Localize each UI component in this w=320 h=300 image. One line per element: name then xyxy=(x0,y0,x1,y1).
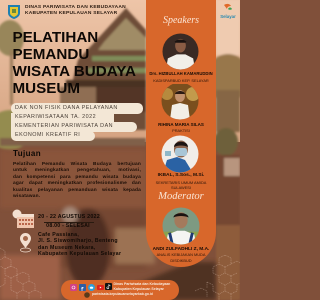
contact text: Dinas Pariwisata dan Kebudayaan xyxy=(114,282,170,286)
logo: Selayar tourism: Selayar xyxy=(220,14,236,19)
purpose paragraph: Pelatihan Pemandu Wisata Budaya bertujuan xyxy=(13,162,141,166)
icon: calendar xyxy=(12,210,34,228)
header organisation text: KABUPATEN KEPULAUAN SELAYAR xyxy=(25,11,117,16)
title xyxy=(12,29,136,97)
time: 08.00 - SELESAI xyxy=(46,223,90,229)
contact text xyxy=(114,282,170,291)
title: WISATA BUDAYA xyxy=(12,63,136,80)
contact text: Kabupaten Kepulauan Selayar xyxy=(114,287,164,291)
moderator heading: Moderator xyxy=(158,191,204,202)
venue text: dan Museum Nekara, xyxy=(38,244,96,250)
subtitle pills: DAK NON FISIK DANA PELAYANAN xyxy=(15,105,118,111)
venue text xyxy=(38,232,121,257)
title: MUSEUM xyxy=(12,80,80,97)
title: PEMANDU xyxy=(12,46,89,63)
speaker role 3 xyxy=(156,180,206,190)
moderator photo xyxy=(162,208,200,244)
speaker photo 3 xyxy=(162,136,198,172)
moderator name: ANDI ZULFADHLI Z, M.A. xyxy=(153,246,209,252)
icon: instagram xyxy=(70,284,77,291)
hexagon network pattern left xyxy=(0,248,42,299)
purpose paragraph: agar dapat meningkatkan profesionalisme dan xyxy=(13,181,141,186)
logo: Selayar tourism xyxy=(220,4,236,19)
icon: crest small xyxy=(84,292,90,298)
icon: facebook xyxy=(79,284,86,291)
subtitle pills: EKONOMI KREATIF RI xyxy=(15,132,80,138)
subtitle pills: KEPARIWISATAAN TA. 2022 xyxy=(15,114,96,120)
subtitle pills xyxy=(11,103,143,141)
speaker name 3: IKBAL, S.Sos., M.Si. xyxy=(158,173,204,178)
purpose paragraph: kualitas pelayanan pemanduan wisata kepada xyxy=(13,188,141,193)
moderator role xyxy=(156,252,206,263)
speaker role 3: SULAWESI xyxy=(171,185,191,190)
logo: regency crest xyxy=(8,5,20,19)
moderator role: ANALIS KEBIJAKAN MUDA xyxy=(157,252,205,257)
venue text: Kabupaten Kepulauan Selayar xyxy=(38,251,121,257)
speaker role 1: KADISPARBUD KEP. SELAYAR xyxy=(153,78,209,83)
date: 20 - 22 AGUSTUS 2022 xyxy=(38,214,100,220)
venue text: Jl. S. Siswomiharjo, Benteng xyxy=(38,238,118,244)
purpose paragraph: untuk meningkatkan pengetahuan, motivasi, xyxy=(13,168,141,173)
speaker name 2: RIHINA MARIA SILAS xyxy=(158,122,204,127)
speaker name 1: Drs. HIZBULLAH KAMARUDDIN xyxy=(149,71,213,76)
background photo collage xyxy=(0,0,240,300)
speaker role 3: SEKRETARIS UMUM AMIDA xyxy=(156,180,206,184)
orange speakers column xyxy=(146,0,216,267)
moderator role: DISDIKBUD xyxy=(170,258,192,263)
speaker photo 1 xyxy=(162,34,198,70)
speakers heading: Speakers xyxy=(163,15,199,26)
hexagon network pattern right xyxy=(195,255,240,300)
purpose paragraph: wisatawan. xyxy=(13,194,40,199)
footer pill: social media and contact xyxy=(61,280,179,300)
icon: location pin xyxy=(20,233,31,252)
header organisation text xyxy=(25,5,126,16)
purpose paragraph xyxy=(13,162,141,199)
heading: Tujuan: Tujuan xyxy=(13,148,41,158)
speaker role 2: PRAKTISI xyxy=(172,128,190,133)
speaker photo 2 xyxy=(162,84,198,120)
venue text: Cafe Passiana, xyxy=(38,232,79,238)
website: pariwisata.kepulauanselayarkab.go.id xyxy=(92,292,153,296)
subtitle pills: KEMENTERIAN PARIWISATA DAN xyxy=(15,123,113,129)
purpose paragraph: dan kompetensi para pemandu wisata budaya xyxy=(13,175,141,180)
header organisation text: DINAS PARIWISATA DAN KEBUDAYAAN xyxy=(25,5,126,10)
icon: youtube xyxy=(97,285,104,290)
icon: twitter xyxy=(88,284,95,291)
title: PELATIHAN xyxy=(12,29,98,46)
icon: tiktok xyxy=(105,283,112,290)
